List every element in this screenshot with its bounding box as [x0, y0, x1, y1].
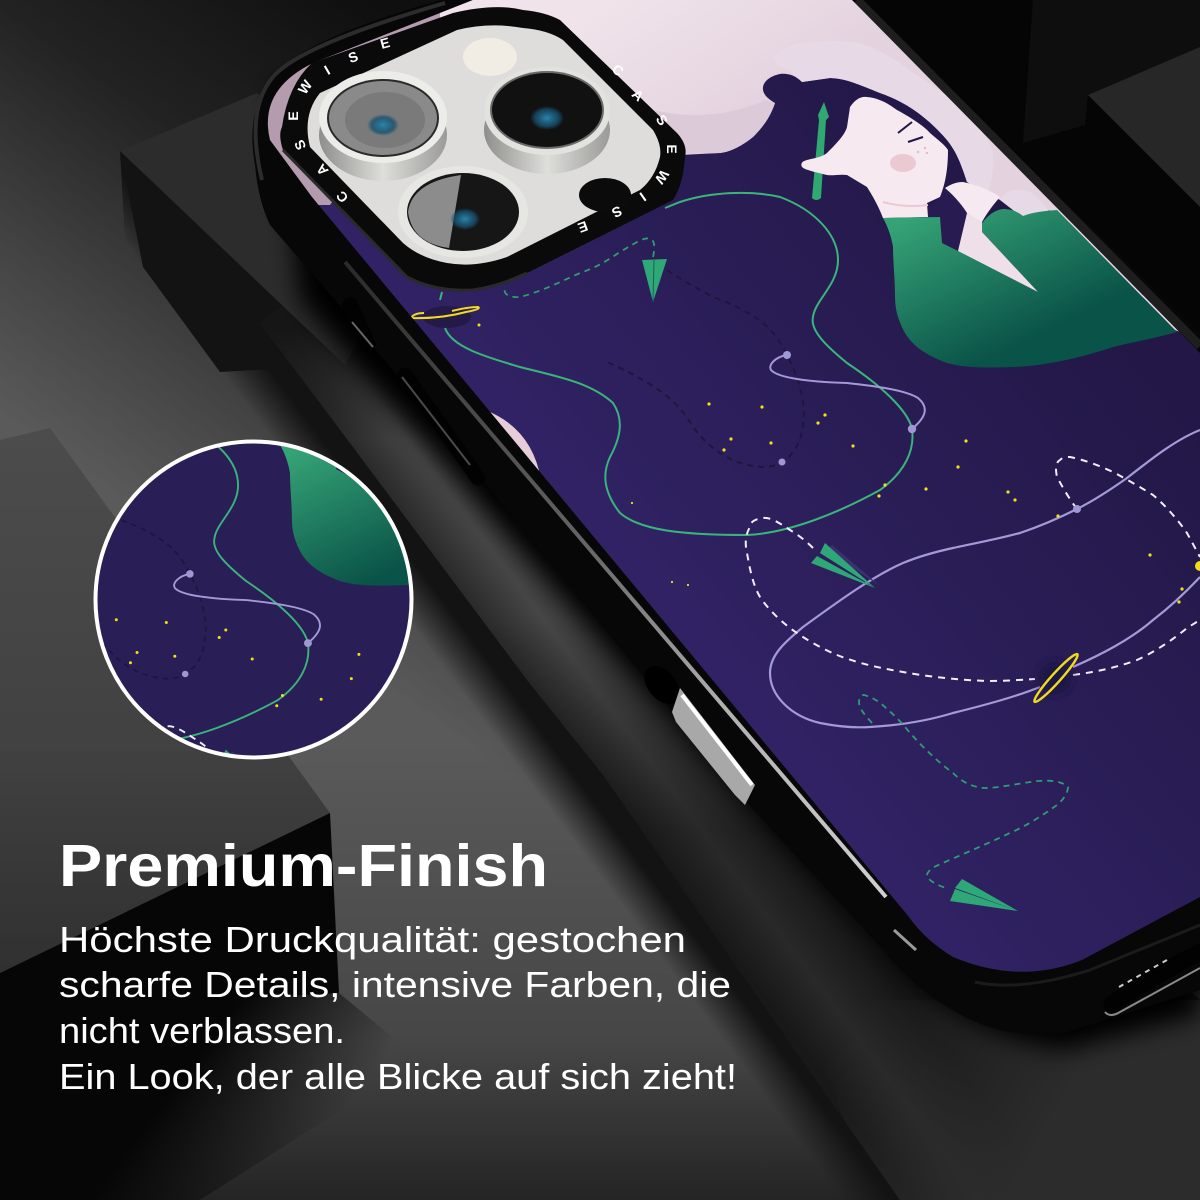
- platform dark side face: [120, 151, 1000, 1200]
- band fade toward bottom: [260, 250, 1200, 1200]
- outer case rim: [256, 3, 445, 180]
- brand text ring: I: [321, 62, 333, 78]
- wallpaper artwork: [250, 0, 1200, 911]
- glossy edge highlight: [345, 262, 886, 897]
- brand text ring: E: [664, 144, 680, 154]
- brand text ring: A: [629, 86, 647, 104]
- body text: Höchste Druckqualität: gestochen: [59, 919, 686, 960]
- island glass: [308, 25, 660, 265]
- phone case body: [252, 0, 1200, 1034]
- body text: Ein Look, der alle Blicke auf sich zieht!: [59, 1056, 737, 1097]
- inset artwork: [104, 446, 409, 754]
- body text: [59, 919, 737, 1097]
- brand text ring: I: [637, 189, 649, 205]
- inset ring: [96, 442, 412, 758]
- lower left block front: [0, 813, 339, 1010]
- inset zoom circle: [94, 440, 414, 760]
- brand text ring: W: [651, 167, 672, 188]
- camera island: [280, 7, 686, 290]
- brand text ring: S: [291, 137, 309, 153]
- lens: upper right: [484, 67, 610, 174]
- lower left block soft shadow: [0, 993, 420, 1200]
- flash: [463, 38, 517, 76]
- brand text ring: E: [576, 218, 590, 236]
- lower left block top: [0, 428, 330, 973]
- lower right floor: [800, 1000, 1200, 1200]
- volume buttons: [402, 375, 478, 478]
- corner highlight: [894, 930, 916, 950]
- brand text ring: [285, 34, 680, 236]
- wallpaper base: [268, 0, 1200, 972]
- island ring sheen: [283, 150, 527, 290]
- brand text ring: S: [609, 203, 625, 221]
- brand text ring: W: [295, 76, 316, 97]
- right block top: [1088, 47, 1200, 207]
- island frame: [280, 7, 686, 290]
- lens: bottom: [398, 166, 528, 258]
- right case rim: [857, 0, 1200, 346]
- title: Premium-Finish: [59, 833, 548, 899]
- sensor: [579, 178, 631, 212]
- brand text ring: A: [313, 161, 331, 179]
- phone: [250, 0, 1200, 1050]
- lens: upper left: [319, 71, 447, 181]
- brand text ring: C: [609, 61, 627, 79]
- phone drop shadow: [273, 77, 1200, 1050]
- lower screen rim: [975, 925, 1200, 985]
- silver side button: [637, 659, 755, 805]
- band fade toward top: [260, 250, 520, 510]
- body text: nicht verblassen.: [59, 1010, 345, 1051]
- charging port: [1105, 952, 1200, 1015]
- platform top face: [120, 93, 420, 365]
- brand text ring: E: [285, 111, 301, 121]
- background top right: [840, 0, 1200, 370]
- brand text ring: S: [653, 112, 671, 128]
- platform side corner: [120, 151, 345, 372]
- brand text ring: C: [333, 188, 351, 206]
- platform lit band: [260, 250, 1200, 1200]
- background panel top right: [1023, 0, 1200, 143]
- body text: scharfe Details, intensive Farben, die: [59, 964, 731, 1005]
- mute switch: [350, 305, 373, 347]
- brand text ring: S: [346, 48, 360, 66]
- inset base: [96, 442, 411, 757]
- brand text ring: E: [378, 34, 392, 52]
- bottom darkening: [0, 740, 1200, 1200]
